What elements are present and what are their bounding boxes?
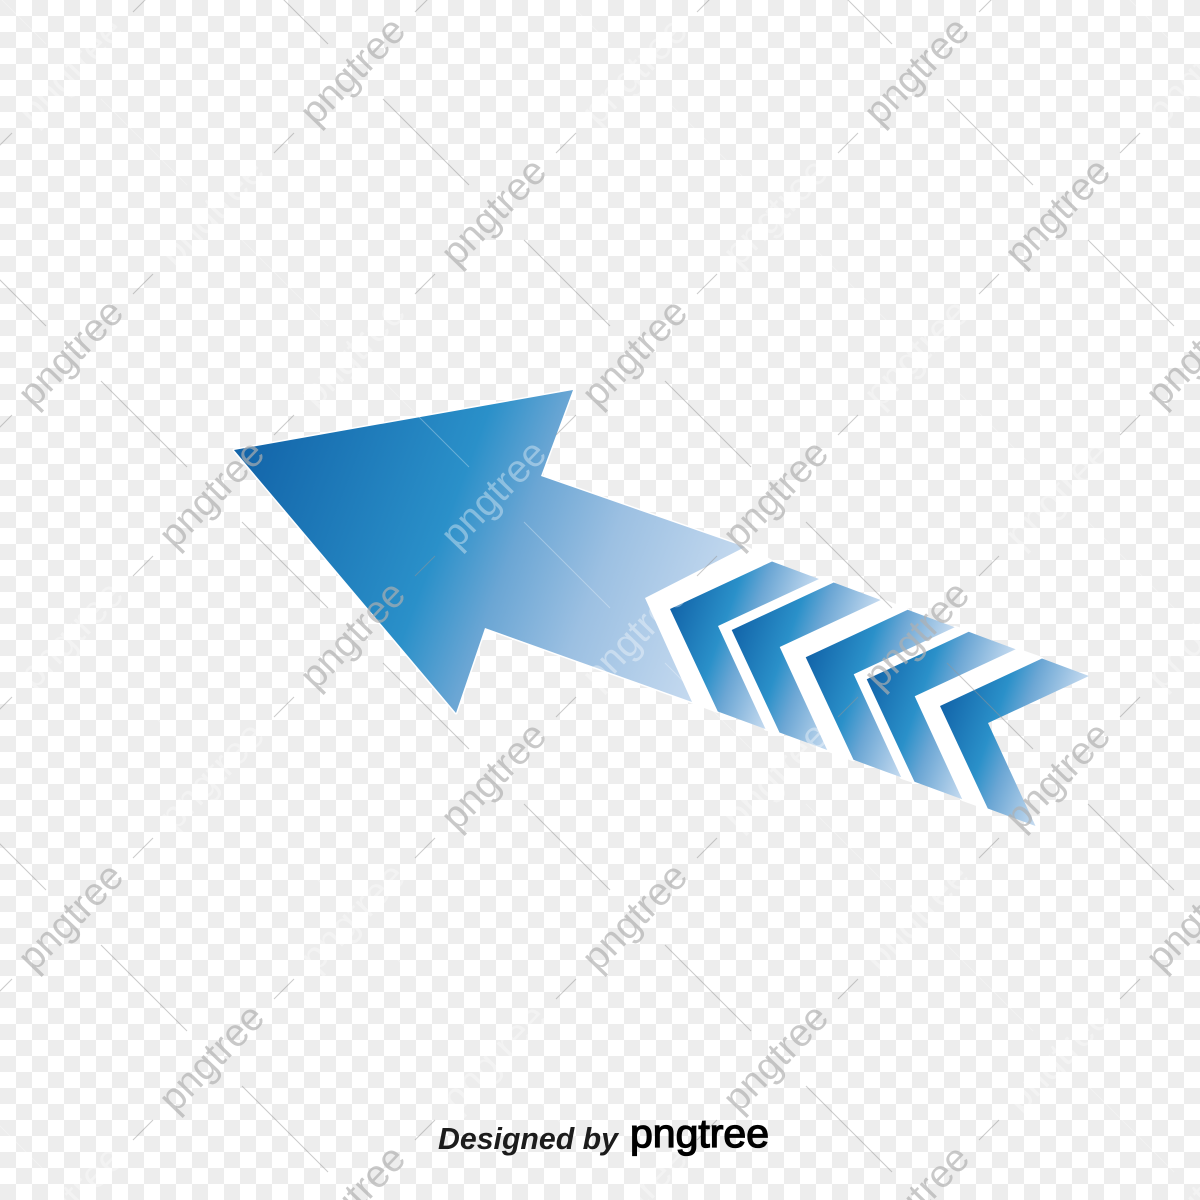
grey watermark text: pngtree (151, 432, 273, 557)
faint light watermark text: pngtree (574, 573, 696, 698)
chevron 5 (940, 658, 1089, 826)
grey watermark text: pngtree (997, 150, 1119, 275)
chevron 1 (670, 562, 819, 729)
chevron tail (670, 562, 1089, 826)
faint light watermark text: pngtree (856, 291, 978, 416)
grey watermark text: pngtree (997, 714, 1119, 839)
grey watermark text: pngtree (574, 291, 696, 416)
faint light watermark text: pngtree (151, 150, 273, 275)
faint light watermark text: pngtree (997, 996, 1119, 1121)
faint light watermark text: pngtree (151, 714, 273, 839)
faint light watermark text: pngtree (715, 150, 837, 275)
faint light watermark text: pngtree (433, 996, 555, 1121)
grey watermark text: pngtree (292, 573, 414, 698)
chevron 2 (732, 582, 881, 750)
grey watermark text: pngtree (856, 9, 978, 134)
white gaps and thin halo behind arrow and chevrons (234, 390, 1042, 808)
faint light watermark text: pngtree (433, 432, 555, 557)
grey watermark text: pngtree (292, 9, 414, 134)
faint light watermark text: pngtree (10, 573, 132, 698)
grey watermark text: pngtree (151, 996, 273, 1121)
footer credit (438, 1112, 769, 1156)
chevron 4 (867, 632, 1016, 799)
pngtree logo wordmark: pngtree (630, 1112, 769, 1156)
faint light watermark text: pngtree (997, 432, 1119, 557)
grey watermark text: pngtree (715, 996, 837, 1121)
grey watermark text: pngtree (10, 291, 132, 416)
faint light watermark text: pngtree (574, 9, 696, 134)
main arrow (234, 390, 745, 713)
grey watermark text: pngtree (574, 855, 696, 980)
grey watermark text: pngtree (715, 432, 837, 557)
grey watermark text: pngtree (433, 150, 555, 275)
faint light watermark text: pngtree (292, 291, 414, 416)
faint light watermark text: pngtree (10, 9, 132, 134)
faint light watermark text: pngtree (715, 714, 837, 839)
designed by label: Designed by (438, 1121, 620, 1156)
grey watermark text: pngtree (10, 855, 132, 980)
grey watermark text: pngtree (433, 714, 555, 839)
chevron 3 (806, 610, 955, 777)
faint light watermark text: pngtree (856, 855, 978, 980)
grey watermark text: pngtree (856, 573, 978, 698)
faint light watermark text: pngtree (292, 855, 414, 980)
